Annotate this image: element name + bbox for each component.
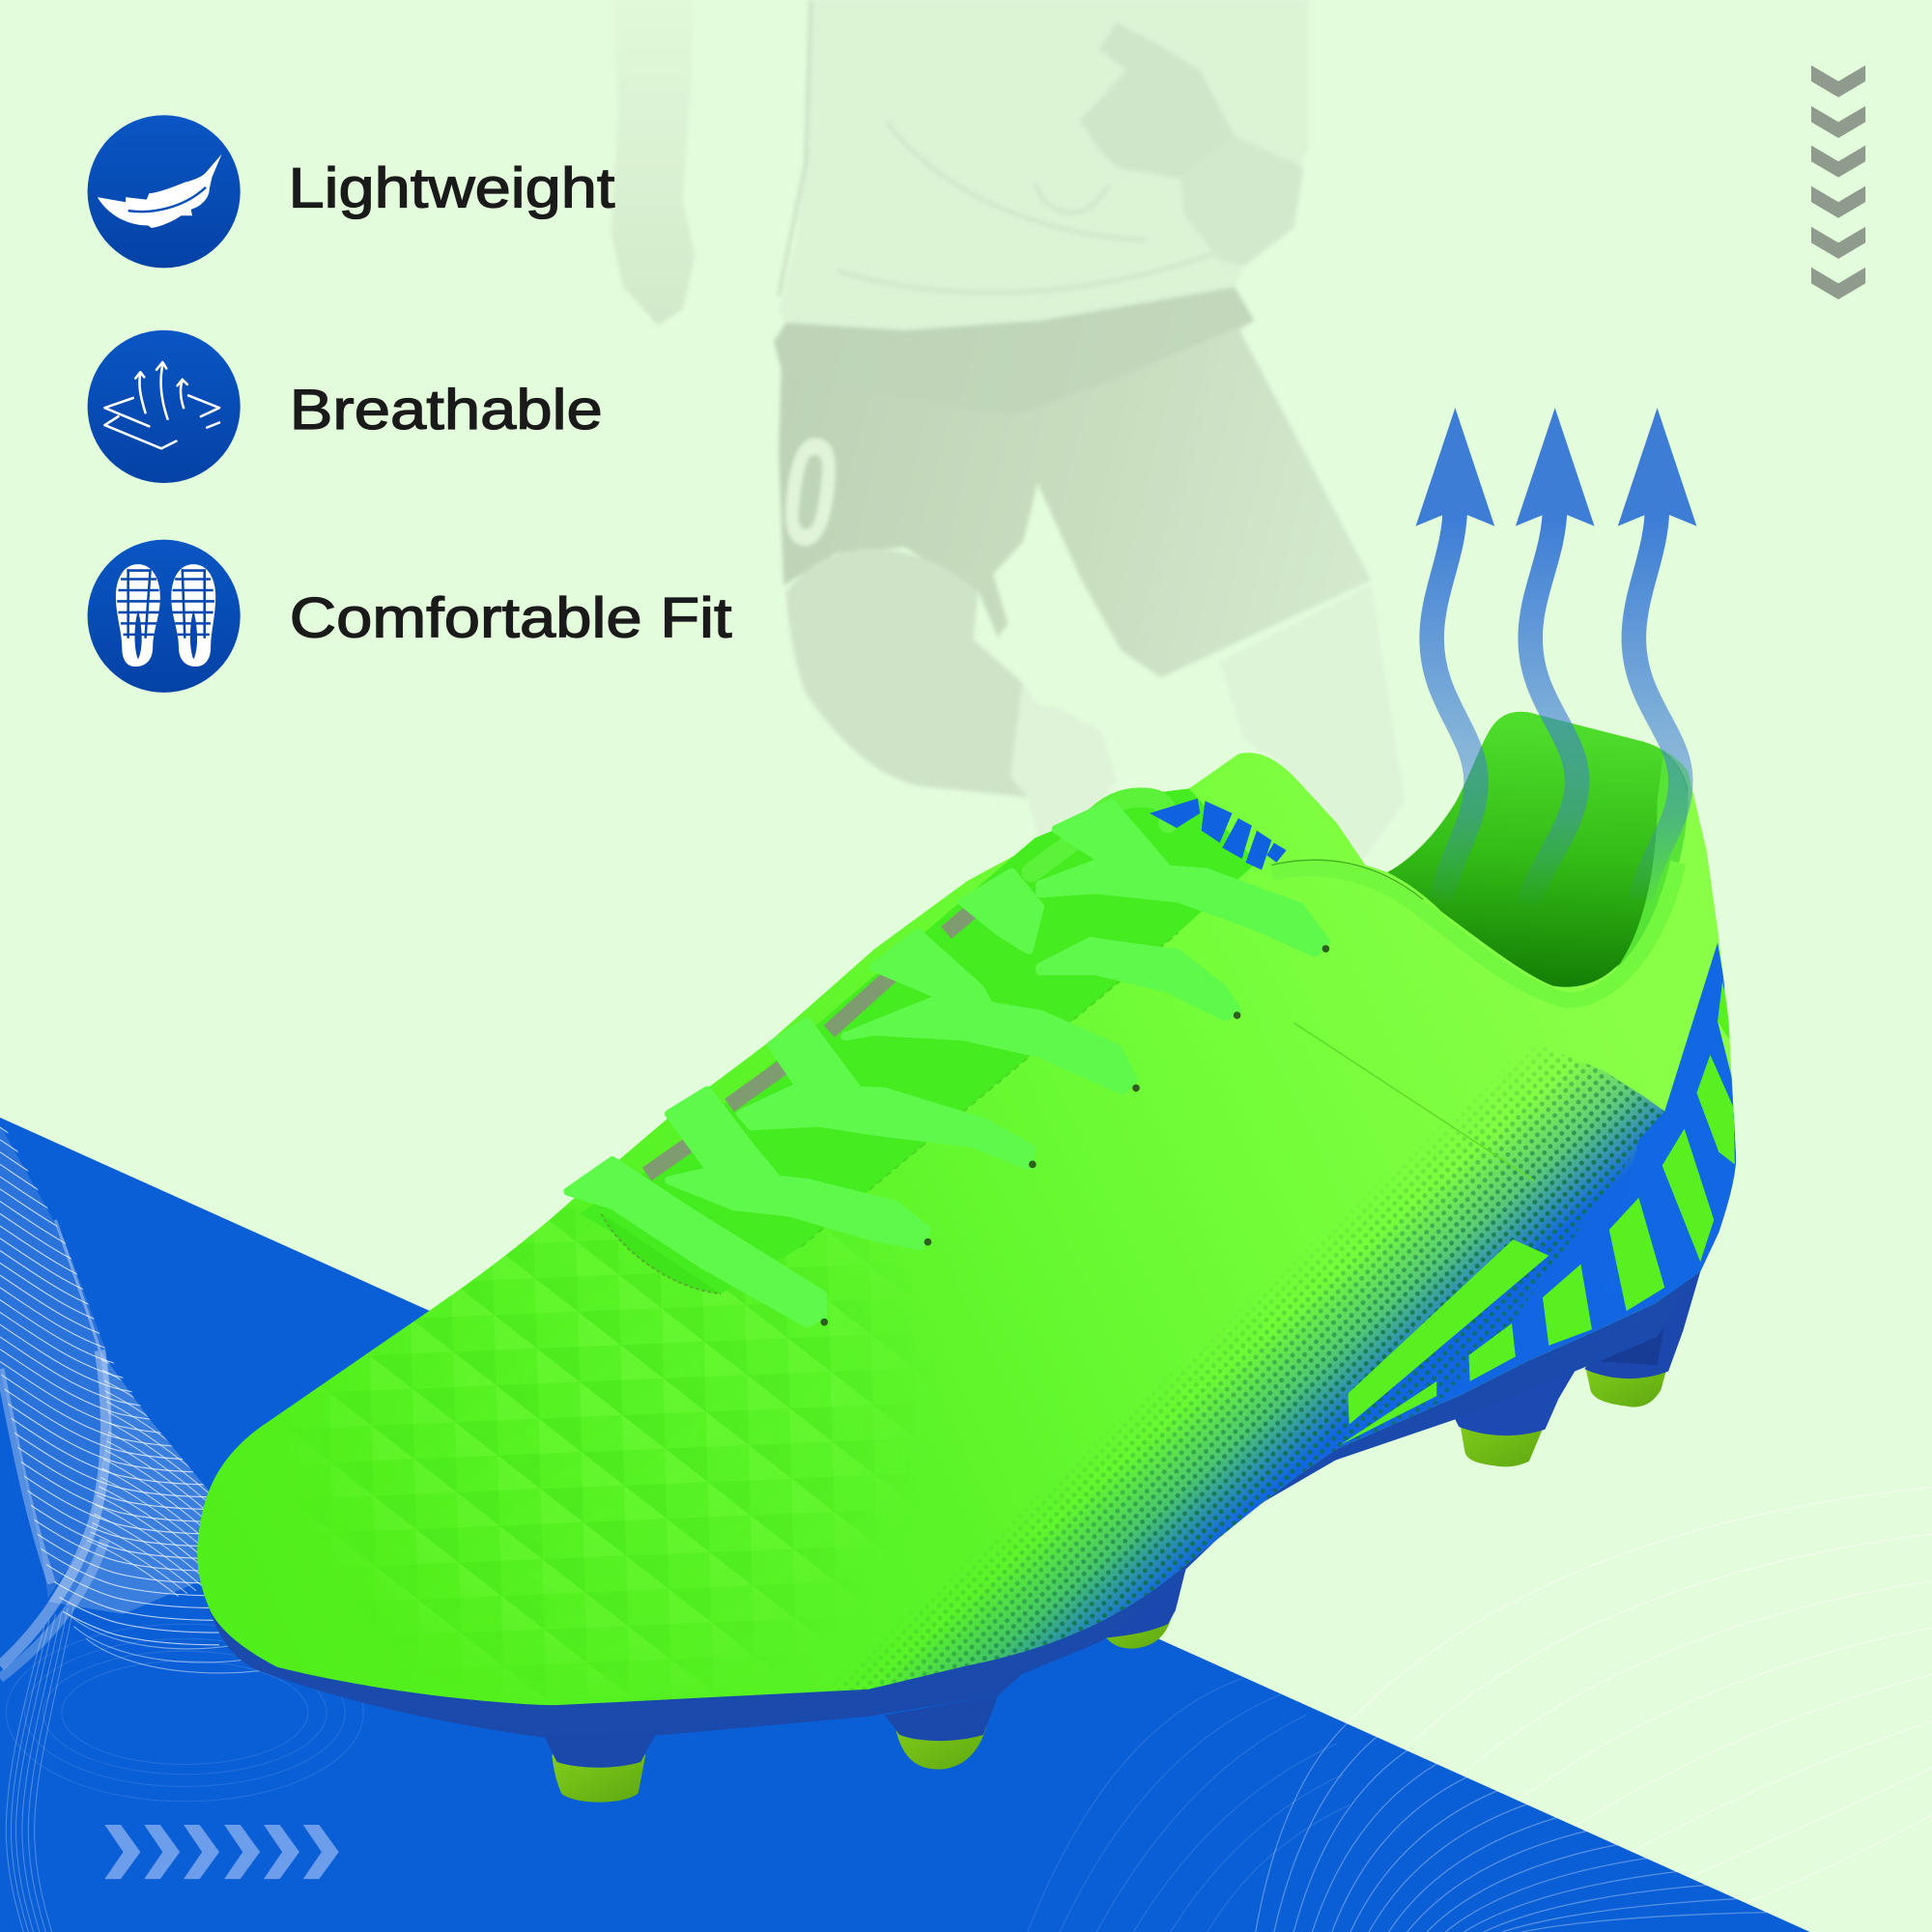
lace segment third cross: [845, 998, 1133, 1091]
player left arm: [611, 0, 695, 326]
wave bright ribbon edges: [0, 1220, 106, 1678]
wave mesh tint: [48, 1350, 212, 1614]
gray lace channel: [647, 899, 985, 1175]
player hand: [1079, 22, 1235, 179]
shirt folds: [779, 0, 1233, 296]
shorts shadow band: [774, 287, 1254, 416]
icon: feather: [88, 115, 241, 268]
player front knee and shin: [786, 549, 1117, 850]
wave line ribbon: hatch: [0, 1115, 219, 1645]
player shorts: [774, 287, 1372, 678]
player sock: [1010, 683, 1117, 850]
lower-left wave lines: [6, 1605, 74, 1932]
boot upper: [197, 711, 1737, 1706]
laces: [568, 804, 1329, 1325]
blue diagonal panel: [0, 1115, 1810, 1932]
toe diamond texture: [353, 1208, 838, 1641]
halftone dots: [813, 1041, 1664, 1700]
lace segment lower cross: [669, 1172, 926, 1246]
heel inner liner: [1616, 754, 1688, 969]
faded player silhouette: [611, 0, 1405, 863]
sole plate: [207, 1269, 1701, 1737]
label: Lightweight: Lightweight: [288, 156, 614, 219]
lace segment lower riser: [669, 1091, 801, 1208]
wave ribbon tint: [0, 1125, 111, 1598]
arrow: airflow left: [1416, 408, 1494, 899]
stud: heel front: [1455, 1350, 1575, 1466]
collar rim: [1271, 863, 1678, 1001]
stud shadow inset: [1601, 1323, 1664, 1365]
label: Breathable: Breathable: [290, 379, 603, 441]
feature: lightweight: [88, 115, 614, 268]
player shirt: [779, 0, 1309, 330]
lace segment second riser: [771, 1021, 856, 1109]
feature: comfortable fit: [88, 540, 732, 693]
stud: forefoot mid: [885, 1695, 998, 1770]
wave line ribbon: mesh: [87, 1358, 209, 1597]
lace segment third riser: [873, 933, 1002, 1028]
heel blue cage: [1634, 943, 1737, 1293]
football boot: [173, 690, 1775, 1803]
feature: breathable: [88, 330, 603, 483]
midfoot seam: [1293, 1023, 1534, 1180]
blue heel fade: [883, 1063, 1737, 1686]
chevrons: top right downward: [1811, 66, 1865, 299]
tongue and eyelet area: [579, 788, 1257, 1293]
icon: breathable layers: [88, 330, 241, 483]
lace segment top cross: [1040, 864, 1325, 952]
tongue strap: [1032, 798, 1169, 872]
chevrons: bottom left rightward: [104, 1825, 339, 1879]
tongue logo: [1150, 799, 1287, 870]
wave fan bottom right on blue: [1256, 1722, 1767, 1932]
stud: toe: [543, 1732, 657, 1803]
stud: heel rear: [1584, 1271, 1700, 1407]
player rear leg: [1220, 585, 1405, 863]
lace segment top riser: [1056, 804, 1178, 881]
icon: shoe soles: [88, 540, 241, 693]
lace segment fourth riser: [962, 872, 1040, 950]
arrow: airflow right: [1618, 408, 1696, 899]
collar lining: [1271, 712, 1688, 1001]
shorts number: 0: [772, 404, 849, 581]
faint wave lines on light background: [1348, 1488, 1932, 1904]
faint rings on blue panel: [6, 1624, 363, 1802]
lace segment lower strap: [568, 1161, 823, 1323]
eyelets: [820, 945, 1329, 1325]
bowl wave lines: [68, 1613, 260, 1673]
arrow: airflow centre: [1516, 408, 1595, 906]
heel lime stripes: [1339, 980, 1735, 1445]
stud: far forefoot: [1096, 1561, 1188, 1649]
player forearm: [1180, 135, 1303, 267]
faint arcs bottom right on blue: [1028, 1678, 1350, 1932]
label: Comfortable Fit: Comfortable Fit: [290, 586, 732, 649]
eyestay stitch: [601, 1213, 721, 1293]
seam: [801, 933, 1178, 1247]
lace segment fourth cross: [1040, 941, 1237, 1016]
lace segment second cross: [741, 1088, 1032, 1166]
